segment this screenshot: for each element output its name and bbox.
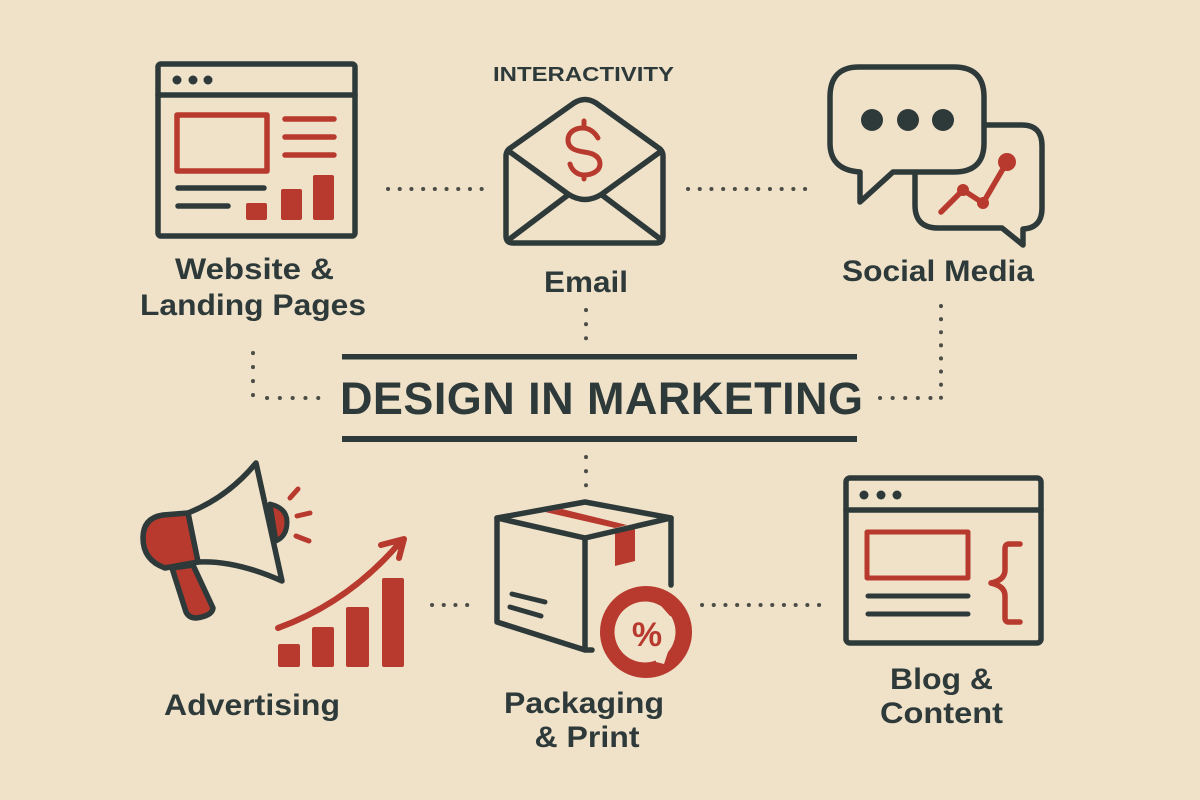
- label: blog and content: [880, 663, 1003, 730]
- icon: megaphone and growth chart: [143, 463, 404, 667]
- icon: website window: [158, 64, 355, 236]
- title: design in marketing: DESIGN IN MARKETING: [340, 373, 863, 424]
- icon: blog window: [846, 478, 1041, 643]
- label: blog and content: Blog &: [890, 663, 993, 696]
- label: packaging and print: [504, 687, 664, 754]
- title: design in marketing: [340, 354, 863, 442]
- label: social media: Social Media: [842, 255, 1034, 288]
- icon: package box with discount badge: %: [632, 616, 662, 654]
- label: website and landing pages: Landing Pages: [140, 289, 366, 322]
- label: packaging and print: & Print: [534, 721, 640, 754]
- icon: social media speech bubbles: [830, 67, 1042, 245]
- heading: interactivity: INTERACTIVITY: [493, 63, 674, 86]
- label: email: Email: [544, 266, 628, 299]
- label: website and landing pages: [140, 253, 366, 322]
- label: blog and content: Content: [880, 697, 1003, 730]
- label: packaging and print: Packaging: [504, 687, 664, 720]
- icon: package box with discount badge: [497, 502, 692, 678]
- icon: email envelope: [506, 100, 663, 243]
- label: website and landing pages: Website &: [175, 253, 334, 286]
- label: advertising: Advertising: [164, 689, 340, 722]
